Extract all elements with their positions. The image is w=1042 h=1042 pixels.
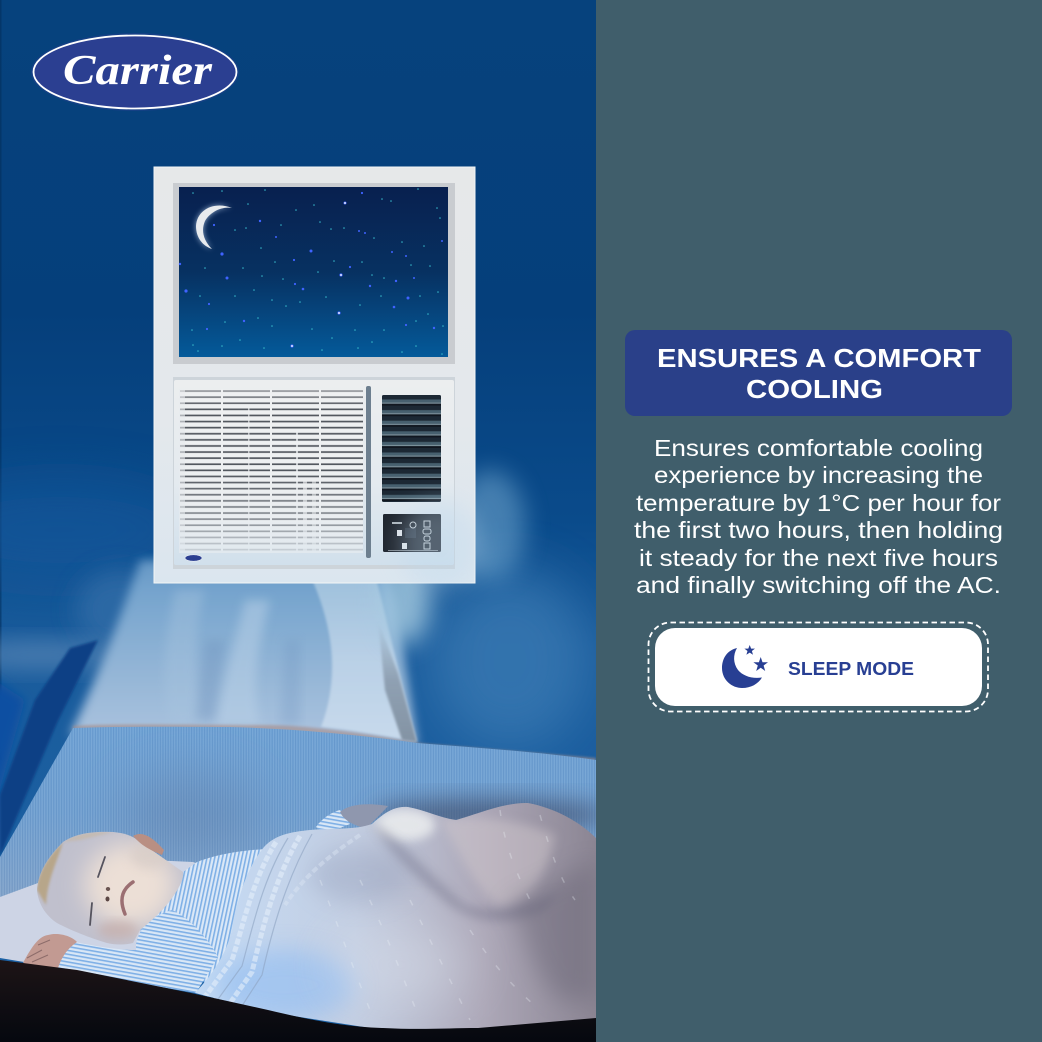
right background panel (596, 0, 1042, 1042)
air conditioner in window frame (154, 167, 480, 590)
stars (179, 192, 443, 348)
night sky window (179, 187, 448, 357)
AC divider bar (366, 386, 371, 558)
body text: and finally switching off the AC. (636, 572, 1001, 598)
heading pill (625, 330, 1012, 416)
baby: lower hand (23, 934, 77, 968)
Carrier logo (31, 33, 239, 111)
mattress (0, 860, 196, 962)
baby: raised arm and hand (316, 810, 350, 830)
heading text: COOLING (746, 374, 883, 404)
AC unit recess (173, 377, 455, 569)
icon: crescent moon and stars (722, 645, 768, 688)
baby: arm sleeve (58, 910, 218, 993)
baby: closed eyes, nose and mouth (90, 857, 133, 925)
body text: experience by increasing the (654, 462, 983, 488)
outer frame (154, 167, 475, 583)
heading text: ENSURES A COMFORT (657, 343, 981, 373)
window recess (173, 183, 455, 364)
body text: Ensures comfortable cooling (654, 435, 983, 461)
crib foreground edge in shadow (0, 960, 596, 1042)
body text: temperature by 1°C per hour for (636, 490, 1001, 516)
photo panel: baby sleeping in crib (0, 0, 610, 1042)
badge label: SLEEP MODE (788, 658, 914, 679)
canopy: sheer curtain (70, 555, 596, 762)
canopy: dark blue drape on the left (0, 640, 98, 860)
AC control panel (383, 514, 441, 552)
heading text (657, 343, 981, 404)
baby (23, 804, 388, 1000)
sleep mode badge (648, 622, 988, 712)
AC unit body (174, 380, 454, 565)
baby: head (37, 832, 184, 944)
Carrier logo: Carrier (63, 48, 213, 94)
blanket: cable-knit braids (204, 836, 300, 1006)
body text (634, 435, 1003, 598)
AC air vent louvers (382, 395, 441, 502)
baby: ear (133, 834, 164, 855)
moon (196, 205, 232, 249)
cool air haze over AC (400, 500, 480, 590)
body text: the first two hours, then holding (634, 517, 1003, 543)
blanket (195, 803, 596, 1030)
body text: it steady for the next five hours (639, 545, 998, 571)
AC front grille (179, 389, 363, 553)
mini Carrier badge on AC (185, 555, 202, 561)
baby: chest in striped romper (140, 849, 275, 1000)
crib bumper (0, 727, 610, 900)
